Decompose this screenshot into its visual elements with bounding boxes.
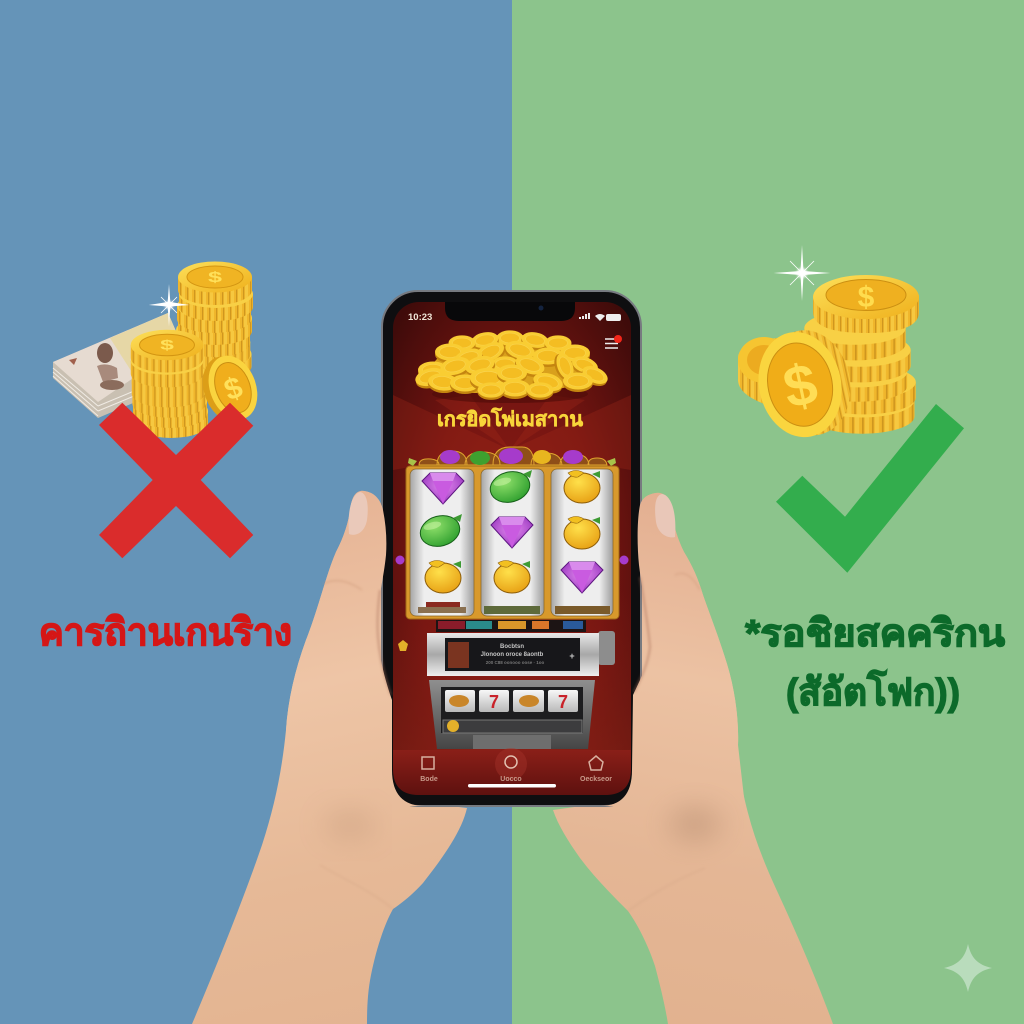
right thumb and palm in front of phone edge (600, 493, 745, 840)
left blue background panel (0, 0, 512, 1024)
phone (382, 291, 641, 806)
gem ornaments above reels (408, 447, 616, 466)
machine info panel: 200 C88 oonooo oose · 1oo (486, 660, 545, 665)
heading: right label: *รอชิยสคคริกน (745, 613, 1005, 655)
slot reels (406, 466, 619, 619)
lower cabinet with tiles: 7 (558, 692, 568, 712)
bottom navigation bar (393, 748, 631, 795)
machine info panel: Bocbtsn (500, 644, 524, 650)
icon: green check mark (776, 404, 964, 573)
machine info panel (427, 631, 615, 676)
status bar: 10:23 (408, 312, 432, 323)
icon: gold coins (approved side): $ (858, 281, 875, 314)
icon: sparkle right (774, 245, 830, 301)
heading: right label: (สัอัตโฟก)) (786, 669, 960, 714)
icon: watermark sparkle (944, 944, 992, 992)
phone screen (393, 302, 631, 795)
icon: banknotes and coins (rejected side): $ (220, 371, 247, 407)
bottom navigation bar: Bode (420, 776, 438, 783)
lower cabinet with tiles: 7 (489, 692, 499, 712)
bottom navigation bar: Uocco (500, 776, 522, 783)
bottom navigation bar: Oeckseor (580, 776, 612, 783)
side gems and charm (396, 556, 628, 651)
notch (445, 302, 575, 321)
icon: gold coins (approved side) (738, 275, 919, 445)
phone body (382, 291, 641, 806)
icon: sparkle left (149, 284, 189, 326)
heading: right label (745, 613, 1005, 714)
lower cabinet with tiles (429, 680, 595, 749)
machine info panel: + (569, 651, 575, 661)
icon: red cross (99, 403, 253, 558)
left thumb and palm in front of phone edge (286, 491, 425, 839)
right hand (553, 493, 833, 1024)
left hand (192, 491, 467, 1024)
gold coin pile (413, 330, 610, 403)
right green background panel (512, 0, 1024, 1024)
colored strip under reels (436, 620, 586, 632)
game title: เกรยิดโพ่เมสาาน (437, 407, 583, 431)
status bar (408, 312, 621, 323)
machine info panel: Jlonoon oroce 8aontb (481, 652, 544, 658)
icon: menu with notification dot (605, 335, 622, 348)
icon: banknotes and coins (rejected side) (53, 262, 266, 438)
heading: left label: คารถิานเกนริาง (39, 612, 292, 654)
icon: gold coins (approved side): $ (778, 351, 823, 421)
